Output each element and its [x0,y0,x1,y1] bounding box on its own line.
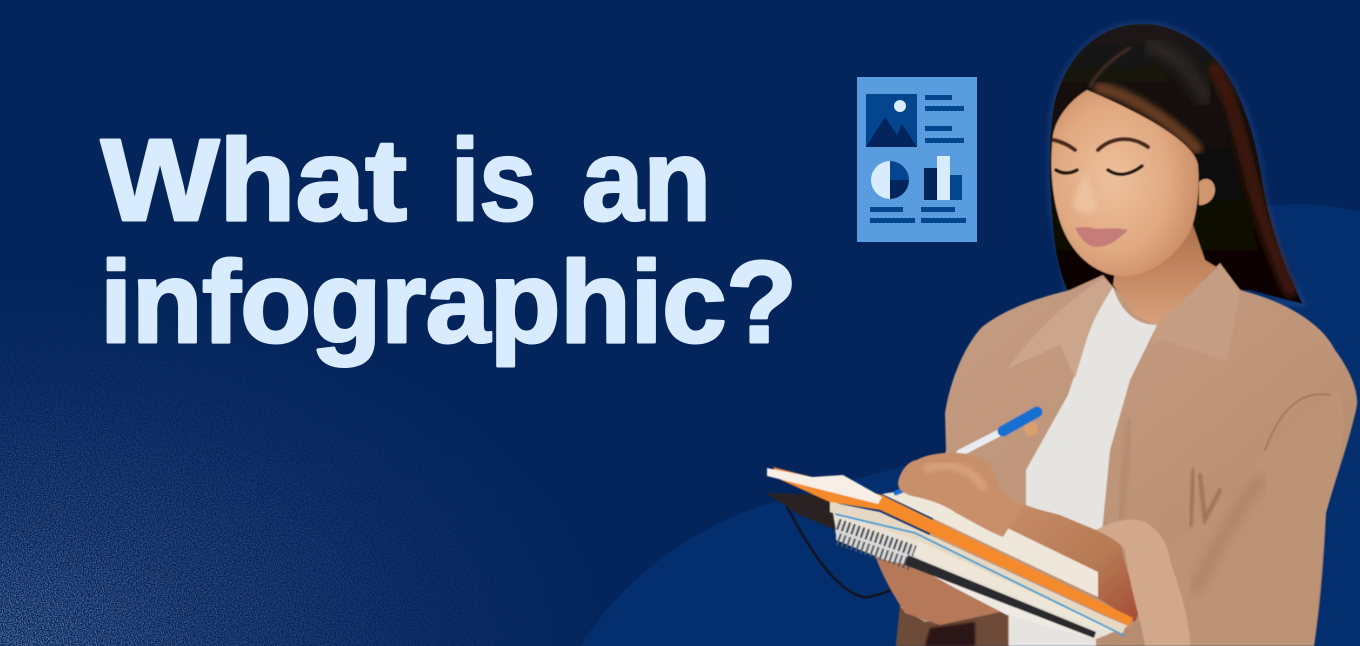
jacket folds [1120,394,1330,590]
grain texture bottom left [0,260,620,646]
open white pages [767,468,882,504]
face [1051,90,1199,276]
blue edge [835,514,1125,636]
hair [1050,24,1303,304]
hand highlight [925,465,985,490]
title [100,115,797,367]
hair highlights [1090,45,1290,290]
stack base [830,500,1128,640]
supporting hand [875,555,1007,625]
forearm [1000,500,1140,622]
spiral notebook [836,520,920,567]
pie chart [871,161,909,199]
ear [1199,179,1215,205]
title word: is: is [451,115,536,245]
notebook stack [766,467,1133,640]
black notebook [766,493,836,530]
orange book [773,467,1133,626]
bar chart [924,156,962,200]
pen [896,412,1038,493]
writing hand [898,453,1022,537]
shirt [1009,287,1157,646]
lower pages [915,566,1094,639]
lower jacket shadow [896,607,1008,646]
eyebrows [1054,139,1148,150]
text lines bottom [870,207,966,223]
title word: an: an [582,115,711,245]
text lines top [925,95,964,143]
background blob [580,204,1360,646]
middle pages [913,538,1120,632]
tan notebook [830,502,1126,634]
lips [1075,227,1128,247]
picture with mountains [866,94,917,147]
woman with notebooks [766,24,1357,646]
black cover strip [905,555,1096,638]
neck [1113,222,1218,328]
title word: What: What [101,115,407,245]
notebook strap [787,507,898,597]
dark fold at lower jacket [925,622,975,646]
nose [1073,170,1097,213]
left collar [1008,278,1113,378]
title line 2: infographic? [100,237,797,367]
closed eyes [1056,166,1142,174]
cuff [1096,520,1190,646]
icon: infographic document [857,77,977,242]
right collar [1150,265,1240,362]
hair glow [1050,24,1303,304]
document sheet [857,77,977,242]
pin button [1024,422,1038,436]
jacket [896,263,1357,646]
sleeve [1168,390,1343,646]
cream pages [882,490,1098,597]
